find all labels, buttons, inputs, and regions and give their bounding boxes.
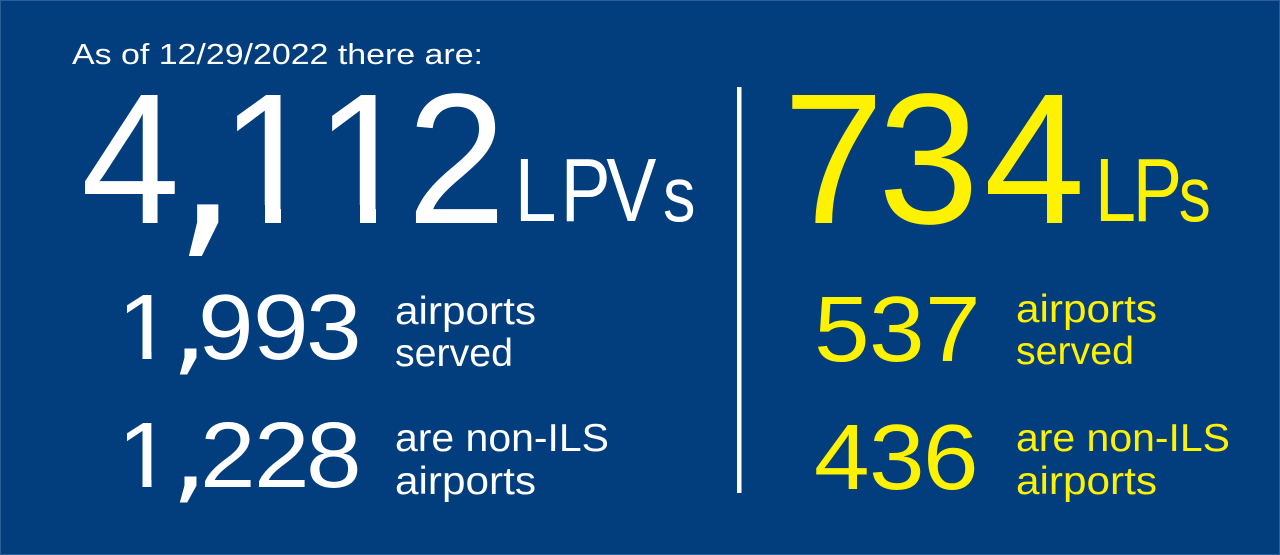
LP non-ILS number: 436 bbox=[814, 406, 979, 509]
LPV airports served label: served bbox=[395, 332, 513, 375]
LP column bbox=[783, 54, 1230, 509]
LP airports served number: 537 bbox=[814, 278, 981, 381]
LP label: LP bbox=[1095, 140, 1182, 241]
LP airports served label: airports bbox=[1016, 288, 1157, 331]
LPV non-ILS number: 228 bbox=[200, 404, 362, 507]
LPV airports served number: 993 bbox=[198, 276, 362, 379]
LPV non-ILS label: airports bbox=[395, 460, 536, 503]
intro text: As of 12/29/2022 there are: bbox=[72, 39, 483, 71]
LPV total: 4 bbox=[81, 54, 180, 263]
LP non-ILS label: airports bbox=[1016, 460, 1157, 503]
LP total: 734 bbox=[783, 54, 1085, 262]
LP airports served label: served bbox=[1016, 330, 1134, 373]
center divider bbox=[737, 87, 742, 493]
LPV label: s bbox=[663, 151, 696, 238]
LPV total: , bbox=[173, 32, 238, 282]
LP non-ILS label: are non-ILS bbox=[1016, 417, 1230, 460]
LPV label: LPV bbox=[515, 140, 656, 241]
LPV column bbox=[81, 32, 696, 516]
LP label: s bbox=[1179, 151, 1211, 238]
LPV non-ILS number: 1 bbox=[117, 404, 173, 507]
LPV airports served number: , bbox=[171, 263, 208, 388]
LPV non-ILS number: , bbox=[171, 391, 208, 516]
LPV non-ILS label: are non-ILS bbox=[395, 417, 609, 460]
LPV airports served label: airports bbox=[395, 290, 536, 333]
LPV total: 112 bbox=[220, 54, 506, 263]
LPV airports served number: 1 bbox=[117, 276, 173, 379]
